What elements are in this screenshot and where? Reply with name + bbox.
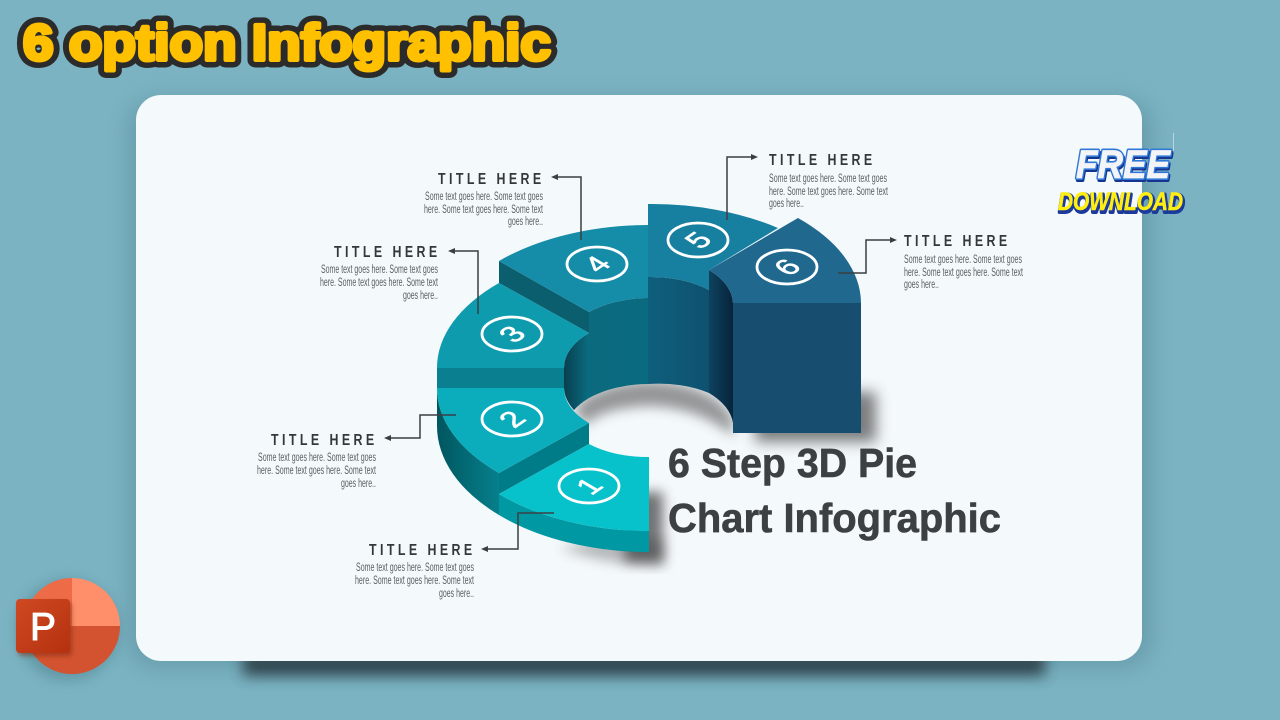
callout 3: goes here..	[403, 290, 438, 302]
callout 4: goes here..	[508, 216, 543, 228]
callout 1: Some text goes here. Some text goes	[356, 562, 474, 574]
card shadow	[130, 100, 1150, 676]
segment 6 top	[709, 218, 861, 303]
side: segment 2 outer	[437, 388, 499, 515]
heading	[668, 440, 1001, 541]
badge: free download	[1058, 133, 1184, 218]
callout 4: TITLE HERE	[438, 170, 541, 187]
segment 3 front	[437, 368, 564, 388]
callout 3: TITLE HERE	[334, 243, 437, 260]
badge 4	[567, 247, 627, 281]
callout 1	[355, 513, 554, 600]
callout 6: here. Some text goes here. Some text	[904, 267, 1023, 279]
badge 2: 2	[492, 406, 534, 432]
icon: PowerPoint logo	[16, 578, 120, 680]
heading: Chart Infographic	[668, 495, 1001, 541]
segment 5 top	[648, 204, 778, 290]
badge: free download: DOWNLOAD	[1059, 190, 1184, 218]
callout 5: Some text goes here. Some text goes	[769, 173, 887, 185]
callout 4: Some text goes here. Some text goes	[425, 191, 543, 203]
badge 5: 5	[678, 227, 720, 253]
callout 2: goes here..	[341, 478, 376, 490]
pie shadows	[560, 381, 876, 566]
callout 3	[320, 243, 478, 314]
badge: free download: DOWNLOAD	[1058, 188, 1183, 216]
segment 3 top	[437, 283, 589, 368]
wall: segment 4 inner	[589, 298, 648, 398]
callout 1: TITLE HERE	[369, 541, 472, 558]
side: segment 4 front	[499, 261, 589, 333]
heading: 6 Step 3D Pie	[668, 440, 917, 486]
callout 6: Some text goes here. Some text goes	[904, 254, 1022, 266]
callout 4	[424, 170, 581, 240]
callout 3: Some text goes here. Some text goes	[321, 264, 438, 276]
badge 3	[482, 317, 542, 351]
segment 2 top	[437, 388, 589, 473]
wall: segment 5 inner	[648, 277, 709, 393]
badge 1	[559, 469, 619, 503]
callout 6	[838, 232, 1023, 291]
callout 4: here. Some text goes here. Some text	[424, 204, 543, 216]
badge: free download: FREE	[1076, 143, 1171, 187]
callout 5	[727, 151, 888, 220]
callout 1: goes here..	[439, 588, 474, 600]
3D pie chart	[437, 204, 861, 552]
wall: segment 3 inner	[564, 333, 589, 410]
segment 6 front	[733, 303, 861, 433]
callout 2: TITLE HERE	[271, 431, 374, 448]
callout 2	[257, 415, 456, 490]
callout 6: TITLE HERE	[904, 232, 1007, 249]
callout 3: here. Some text goes here. Some text	[320, 277, 438, 289]
title: 6 option Infographic	[23, 14, 551, 71]
segment 1 top	[499, 444, 649, 531]
callout 2: Some text goes here. Some text goes	[258, 452, 376, 464]
callout 5: TITLE HERE	[769, 151, 872, 168]
badge: free download: FREE	[1077, 145, 1172, 189]
badge 4: 4	[577, 251, 619, 277]
badge 2	[482, 402, 542, 436]
callout 5: goes here..	[769, 198, 804, 210]
badge 6	[757, 250, 817, 284]
wall: segment 6 inner	[709, 270, 733, 433]
callout 6: goes here..	[904, 279, 939, 291]
badge 3: 3	[492, 321, 534, 347]
panel: white card	[136, 95, 1142, 661]
side: segment 1 outer	[499, 494, 649, 552]
badge 6: 6	[767, 254, 809, 280]
callout 5: here. Some text goes here. Some text	[769, 186, 888, 198]
badge 5	[668, 223, 728, 257]
icon: PowerPoint logo: P	[30, 606, 56, 649]
badge 1: 1	[569, 473, 611, 499]
segment 4 top	[499, 225, 648, 312]
title: 6 option Infographic	[23, 14, 551, 71]
callout 2: here. Some text goes here. Some text	[257, 465, 376, 477]
callout 1: here. Some text goes here. Some text	[355, 575, 474, 587]
badge: free download: FREE	[1076, 143, 1171, 187]
side: segment 2 front	[499, 423, 589, 494]
